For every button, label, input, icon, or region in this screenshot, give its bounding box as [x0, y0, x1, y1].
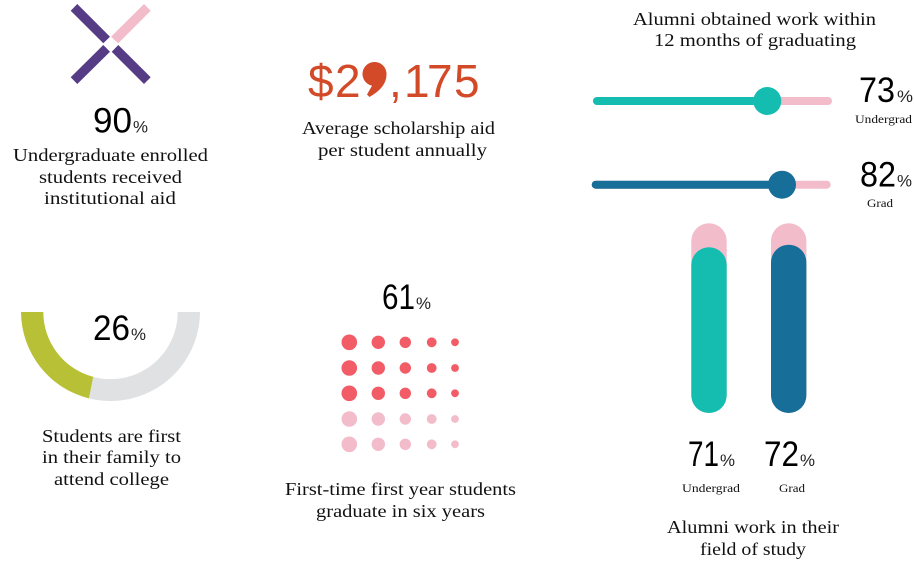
- stat: $29,175: 7: [427, 55, 453, 107]
- text: aid description: institutional aid: [44, 188, 176, 208]
- stat: 73% undergrad: [855, 71, 913, 126]
- stat: 82% grad: 82: [860, 156, 896, 194]
- stat: 26%: 26: [93, 309, 130, 348]
- stat: 73% undergrad: %: [897, 87, 913, 106]
- stat: 72% grad: [764, 435, 815, 495]
- stat: 61%: 61: [382, 278, 415, 317]
- text: field of study description: Alumni work in their: [667, 517, 839, 537]
- heading: alumni work within 12 months: Alumni obtained work within: [633, 9, 876, 29]
- stat: 82% grad: [860, 156, 912, 210]
- chart: undergrad vertical bar 71%: [691, 223, 727, 413]
- chart: grad vertical bar 72%: [771, 223, 806, 413]
- stat: 82% grad: Grad: [867, 198, 893, 210]
- stat: 73% undergrad: 73: [859, 71, 895, 110]
- panel: scholarship aid: [302, 55, 500, 160]
- slider: undergrad 73%: [593, 87, 832, 115]
- text: scholarship description: Average scholarship aid: [302, 118, 495, 138]
- panel: institutional aid: [13, 4, 212, 208]
- panel: first in family: [21, 309, 200, 489]
- stat: $29,175: $: [308, 55, 334, 107]
- text: aid description: students received: [39, 167, 182, 187]
- panel: alumni field of study: [667, 223, 844, 559]
- slider: grad 82%: [592, 171, 831, 199]
- panel: alumni obtained work: [592, 9, 913, 210]
- stat: 90%: %: [133, 118, 148, 136]
- stat: $29,175: 5: [454, 55, 480, 107]
- text: first in family description: in their family to: [42, 447, 181, 467]
- stat: 72% grad: %: [800, 451, 815, 470]
- stat: $29,175: [308, 55, 480, 107]
- stat: 71% undergrad: [682, 435, 740, 495]
- text: graduation description: graduate in six years: [316, 501, 485, 521]
- icon: purple and pink X: [71, 4, 151, 84]
- stat: 26%: %: [131, 325, 146, 344]
- stat: 61%: %: [416, 294, 431, 313]
- stat: 90%: 90: [93, 102, 132, 140]
- stat: 82% grad: %: [897, 172, 912, 190]
- heading: alumni work within 12 months: 12 months of graduating: [654, 30, 856, 50]
- stat: 71% undergrad: 71: [688, 435, 719, 474]
- text: graduation description: First-time first year students: [285, 479, 516, 499]
- text: first in family description: attend college: [54, 469, 169, 489]
- stat: $29,175: 1: [404, 55, 430, 107]
- stat: $29,175: 2: [335, 55, 361, 107]
- text: scholarship description: per student annually: [318, 140, 487, 160]
- stat: 73% undergrad: Undergrad: [855, 114, 912, 126]
- text: field of study description: field of study: [700, 539, 806, 559]
- text: aid description: Undergraduate enrolled: [13, 145, 208, 165]
- panel: six year graduation: [285, 278, 520, 521]
- stat: 71% undergrad: Undergrad: [682, 483, 740, 495]
- stat: 72% grad: 72: [764, 435, 799, 474]
- stat: 71% undergrad: %: [720, 451, 735, 470]
- stat: $29,175: ,: [389, 55, 402, 107]
- text: first in family description: Students are first: [42, 426, 181, 446]
- chart: half donut 26%: [21, 312, 200, 401]
- chart: dot grid: [342, 334, 459, 452]
- stat: $29,175: 9: [368, 60, 382, 90]
- stat: 72% grad: Grad: [779, 483, 805, 495]
